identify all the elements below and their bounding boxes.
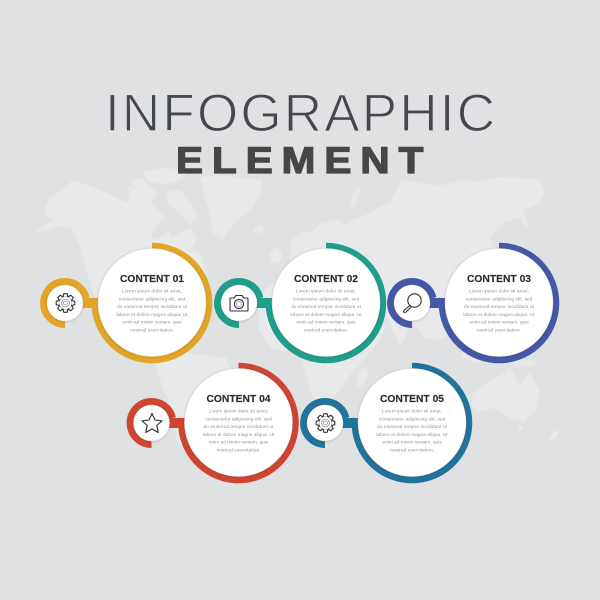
body text: enim ad minim veniam, quis xyxy=(122,320,182,326)
body text: consectetur adipiscing elit, sed xyxy=(466,296,533,302)
title: INFOGRAPHIC: INFOGRAPHIC xyxy=(105,84,495,143)
panel: content 01 xyxy=(44,246,209,360)
disc: main xyxy=(358,368,466,476)
ring: large yellow xyxy=(95,246,209,360)
heading: CONTENT 05 xyxy=(380,394,444,405)
heading: CONTENT 03 xyxy=(467,274,531,285)
body text xyxy=(376,408,448,453)
body text: consectetur adipiscing elit, sed xyxy=(119,296,186,302)
body text: do eiusmod tempor incididunt ut xyxy=(464,304,535,310)
panel: content 05 xyxy=(304,366,469,480)
ring: small teal xyxy=(218,282,260,324)
connector xyxy=(339,418,358,428)
body text: do eiusmod tempor incididunt ut xyxy=(117,304,188,310)
body text: labore et dolore magna aliqua. Ut xyxy=(463,312,535,318)
body text: Lorem ipsum dolor sit amet, xyxy=(208,408,268,414)
ring: small blue xyxy=(391,282,433,324)
disc: main xyxy=(272,248,380,356)
disc: icon xyxy=(394,285,430,321)
body text: nostrud exercitation. xyxy=(130,327,174,333)
body text: nostrud exercitation. xyxy=(477,327,521,333)
body text: nostrud exercitation. xyxy=(390,447,434,453)
connector xyxy=(253,298,272,308)
ring: large blue xyxy=(442,246,556,360)
body text: do eiusmod tempor incididunt ut xyxy=(204,424,274,430)
disc: icon xyxy=(307,405,343,441)
world map xyxy=(34,168,560,448)
ring: large petrol xyxy=(355,366,469,480)
panel: content 03 xyxy=(391,246,556,360)
ring: large teal xyxy=(269,246,383,360)
body text: enim ad minim veniam, quis xyxy=(296,320,356,326)
body text xyxy=(116,288,188,333)
connector xyxy=(166,418,184,428)
body text: labore et dolore magna aliqua. Ut xyxy=(290,312,362,318)
subtitle: ELEMENT: ELEMENT xyxy=(176,140,423,182)
icon: gear xyxy=(56,294,75,312)
connector xyxy=(79,298,98,308)
ring: small red xyxy=(130,402,172,444)
ring: large red xyxy=(182,366,295,480)
body text: enim ad minim veniam, quis xyxy=(382,440,442,446)
body text: enim ad minim veniam, quis xyxy=(469,320,529,326)
ring: small petrol xyxy=(304,402,346,444)
body text: do eiusmod tempor incididunt ut xyxy=(291,304,362,310)
disc: icon xyxy=(221,285,257,321)
body text: nostrud exercitation. xyxy=(304,327,348,333)
body text: Lorem ipsum dolor sit amet, xyxy=(469,288,529,294)
heading: CONTENT 01 xyxy=(120,274,184,285)
body text: enim ad minim veniam, quis xyxy=(209,440,269,446)
body text: nostrud exercitation. xyxy=(216,447,260,453)
body text: Lorem ipsum dolor sit amet, xyxy=(296,288,356,294)
disc: main xyxy=(184,368,292,476)
icon: gear xyxy=(316,414,335,432)
body text: labore et dolore magna aliqua. Ut xyxy=(376,432,448,438)
panel: content 04 xyxy=(130,366,295,480)
heading: CONTENT 02 xyxy=(294,274,358,285)
body text: labore et dolore magna aliqua. Ut xyxy=(116,312,188,318)
icon: magnifier xyxy=(404,294,421,312)
body text xyxy=(290,288,362,333)
connector xyxy=(426,298,445,308)
icon: star xyxy=(142,414,162,432)
ring: small yellow xyxy=(44,282,86,324)
body text: Lorem ipsum dolor sit amet, xyxy=(382,408,442,414)
panel: content 02 xyxy=(218,246,383,360)
body text xyxy=(203,408,275,453)
body text: Lorem ipsum dolor sit amet, xyxy=(122,288,182,294)
body text xyxy=(463,288,535,333)
body text: consectetur adipiscing elit, sed xyxy=(205,416,272,422)
disc: icon xyxy=(134,405,170,441)
heading: CONTENT 04 xyxy=(206,394,271,405)
disc: icon xyxy=(47,285,83,321)
disc: main xyxy=(445,248,553,356)
icon: camera xyxy=(230,296,248,311)
body text: consectetur adipiscing elit, sed xyxy=(293,296,360,302)
body text: do eiusmod tempor incididunt ut xyxy=(377,424,448,430)
body text: labore et dolore magna aliqua. Ut xyxy=(203,432,275,438)
body text: consectetur adipiscing elit, sed xyxy=(379,416,446,422)
disc: main xyxy=(98,248,206,356)
